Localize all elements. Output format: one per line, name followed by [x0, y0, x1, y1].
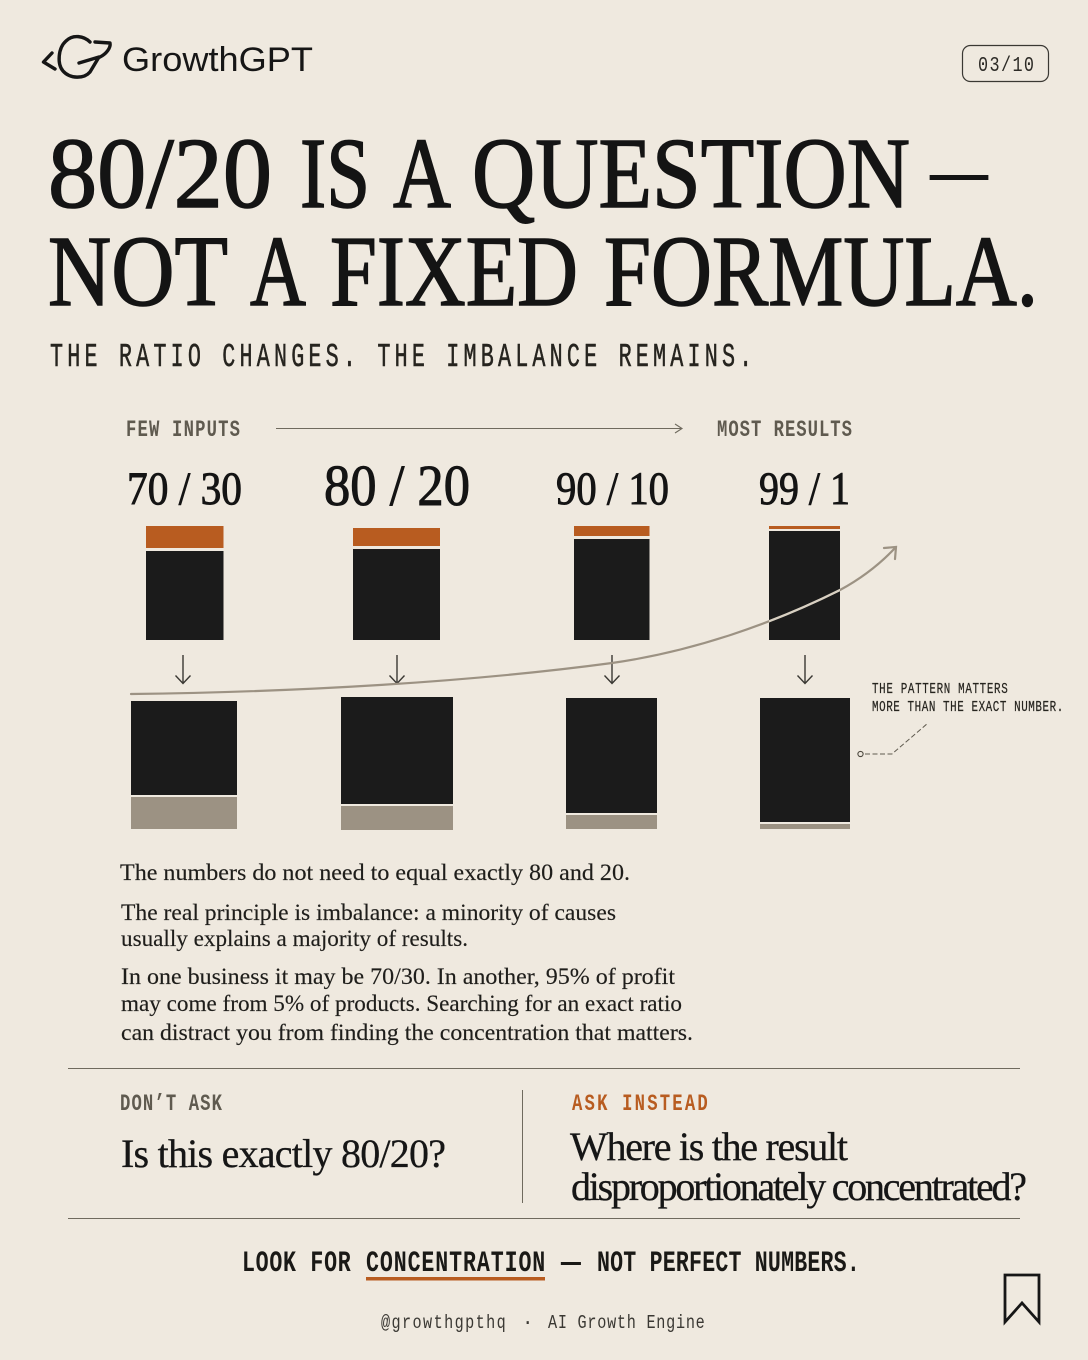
logo: GrowthGPT	[44, 37, 313, 79]
axis: few inputs to most results: FEW INPUTS	[126, 418, 240, 444]
ratio column: 70/30: 70 / 30	[127, 463, 242, 515]
page badge	[962, 46, 1048, 82]
panel: ask instead: disproportionately concentrated?	[571, 1164, 1027, 1209]
title: A	[393, 117, 451, 229]
body text: The real principle is imbalance: a minority of causes	[121, 900, 616, 925]
icon: G orbit	[44, 37, 110, 77]
footer handle: AI Growth Engine	[548, 1314, 705, 1335]
title	[48, 111, 1038, 327]
title: FIXED	[330, 215, 578, 327]
arrow: down	[390, 655, 404, 684]
body text: usually explains a majority of results.	[121, 926, 468, 951]
callout: pattern note: THE PATTERN MATTERS	[872, 681, 1008, 698]
ratio column: 99/1	[759, 463, 850, 829]
footer handle: ·	[522, 1312, 533, 1334]
subtitle: THE RATIO CHANGES. THE IMBALANCE REMAINS.	[50, 340, 752, 377]
arrow: axis	[276, 424, 682, 433]
title: NOT	[48, 215, 228, 327]
body text: can distract you from finding the concentration that matters.	[121, 1020, 693, 1045]
title: IS	[300, 117, 370, 229]
ratio column: 90/10: 90 / 10	[556, 463, 669, 515]
arrow: down	[604, 655, 620, 684]
callout: pattern note	[858, 681, 1063, 757]
arrow: down	[798, 655, 812, 684]
ratio column: 99/1: 99 / 1	[759, 463, 850, 515]
ratio column: 90/10	[556, 463, 669, 829]
body text	[120, 860, 693, 1045]
panel: don't ask: Is this exactly 80/20?	[121, 1131, 446, 1176]
panel: ask instead	[570, 1092, 1027, 1209]
title: —	[929, 111, 989, 223]
panel: don't ask	[120, 1092, 446, 1176]
body text: The numbers do not need to equal exactly 80 and 20.	[120, 860, 630, 885]
brand name: GrowthGPT	[122, 41, 313, 79]
page badge: 03/10	[978, 53, 1034, 78]
body text: In one business it may be 70/30. In another, 95% of profit	[121, 964, 676, 989]
arrow: rising concentration curve	[131, 547, 896, 694]
ratio column: 70/30	[127, 463, 242, 829]
closing line: CONCENTRATION	[366, 1246, 545, 1280]
panel: ask instead: Where is the result	[570, 1124, 848, 1169]
icon: bookmark	[1005, 1275, 1039, 1322]
title: 80/20	[48, 117, 272, 229]
body text: may come from 5% of products. Searching for an exact ratio	[121, 991, 682, 1016]
panel: don't ask: DON’T ASK	[120, 1092, 223, 1118]
axis: few inputs to most results	[126, 418, 852, 444]
footer handle	[381, 1312, 705, 1335]
title: A	[250, 215, 306, 327]
axis: few inputs to most results: MOST RESULTS	[717, 418, 852, 444]
callout: pattern note: MORE THAN THE EXACT NUMBER.	[872, 699, 1063, 716]
ratio column: 80/20: 80 / 20	[324, 453, 470, 518]
title: QUESTION	[472, 117, 910, 229]
closing line: LOOK FOR	[242, 1246, 351, 1280]
closing line: —	[560, 1247, 582, 1281]
ratio column: 80/20	[324, 453, 470, 830]
footer handle: @growthgpthq	[381, 1314, 506, 1335]
closing line	[242, 1246, 860, 1281]
arrow: down	[176, 655, 190, 684]
panel: ask instead: ASK INSTEAD	[572, 1092, 708, 1118]
closing line: NOT PERFECT NUMBERS.	[597, 1246, 860, 1280]
